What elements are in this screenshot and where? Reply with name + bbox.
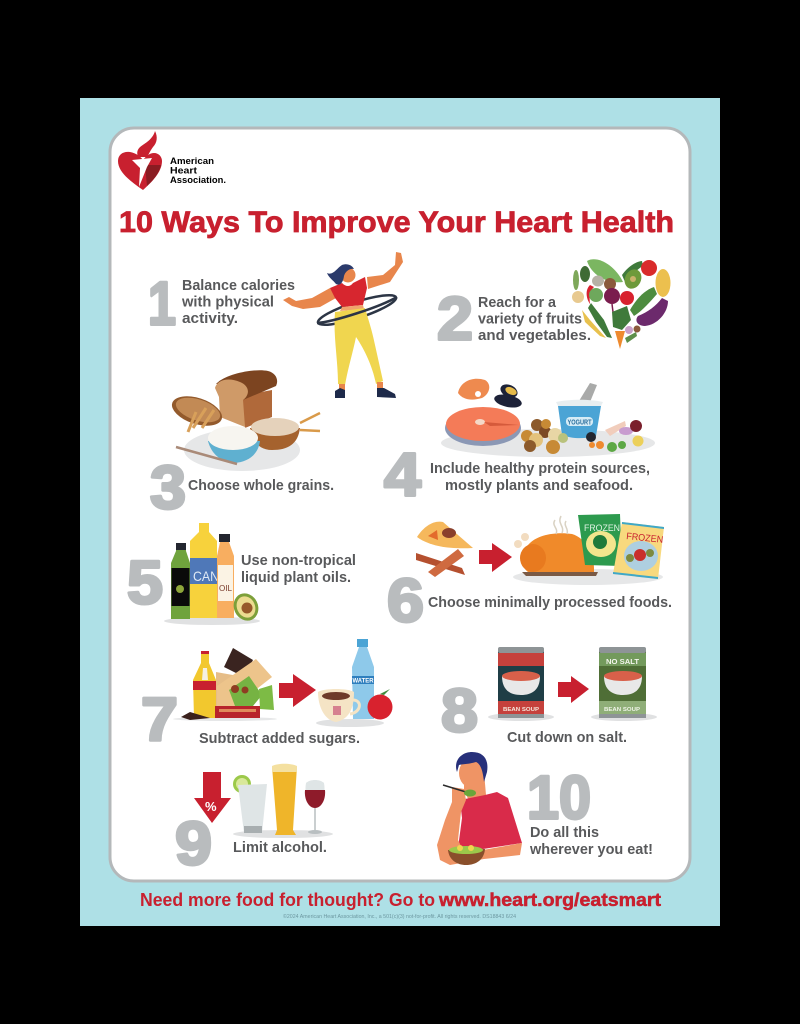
- text 1: [181, 277, 295, 327]
- text 8: Cut down on salt.: [507, 729, 627, 746]
- illustration: pizza and bacon: [416, 522, 473, 577]
- arrow: [279, 674, 316, 707]
- text 5: Use non-tropical: [241, 552, 356, 569]
- text 5: liquid plant oils.: [241, 569, 351, 586]
- text 10: Do all this: [530, 824, 599, 841]
- text 2: and vegetables.: [478, 327, 591, 344]
- illustration: oil bottles and avocado: [164, 523, 263, 625]
- item 8: cut down on salt: [441, 647, 657, 746]
- text 4: [430, 460, 650, 494]
- illustration: heart of vegetables: [572, 259, 670, 349]
- illustration: drinks: [233, 764, 333, 838]
- number 7: 7: [141, 686, 178, 754]
- icon: heart and torch: [118, 131, 162, 190]
- arrow: [479, 543, 512, 572]
- item 5: plant oils: [127, 523, 356, 625]
- text 3: Choose whole grains.: [188, 477, 334, 494]
- item 10: wherever you eat: [437, 752, 653, 865]
- illustration: soda and snack bars: [173, 648, 277, 721]
- item 1: balance calories: [148, 252, 403, 398]
- text 1: activity.: [182, 310, 238, 327]
- arrow: [558, 676, 589, 703]
- text 10: [529, 824, 653, 858]
- text 5: [241, 552, 356, 586]
- number 6: 6: [387, 566, 424, 634]
- illustration: no salt soup can: NO SALT: [606, 659, 640, 666]
- text 1: with physical: [181, 294, 274, 310]
- footer call to action: www.heart.org/eatsmart: [438, 889, 661, 910]
- illustration: frozen vegetable packs: [578, 514, 664, 579]
- logo text: Association.: [170, 175, 226, 186]
- number 3: 3: [150, 454, 186, 522]
- illustration: woman with hula hoop: [283, 252, 403, 398]
- number 5: 5: [127, 548, 163, 616]
- item 3: whole grains: [150, 370, 334, 522]
- illustration: salmon, nuts, yogurt: [441, 379, 655, 457]
- logo text: [170, 156, 226, 186]
- text 1: Balance calories: [182, 277, 295, 294]
- white content panel: [110, 128, 690, 881]
- title: 10 Ways To Improve Your Heart Health: [119, 206, 674, 239]
- item 9: limit alcohol: [175, 764, 333, 878]
- illustration: regular soup can: [488, 647, 554, 721]
- illustration: salmon, nuts, yogurt: YOGURT: [568, 420, 592, 426]
- logo text: Heart: [170, 166, 198, 176]
- logo: American Heart Association: [118, 131, 226, 190]
- copyright line: ©2024 American Heart Association, Inc., a 501(c)(3) not-for-profit. All rights reserved. DS18843 6/24: [283, 913, 516, 920]
- teal page background: [80, 98, 720, 926]
- footer call to action: Need more food for thought? Go to: [140, 889, 435, 910]
- illustration: water, tea and apple: WATER: [352, 678, 374, 684]
- item 6: minimally processed foods: [387, 514, 672, 634]
- number 8: 8: [441, 676, 478, 744]
- number 2: 2: [437, 284, 473, 352]
- illustration: oil bottles and avocado: OIL: [219, 584, 233, 593]
- text 2: Reach for a: [478, 294, 557, 311]
- text 9: Limit alcohol.: [233, 839, 327, 856]
- number 10: 10: [527, 764, 591, 832]
- arrow: down with percent: %: [205, 799, 217, 814]
- illustration: bread and grains: [168, 370, 320, 471]
- illustration: oil bottles and avocado: CAN: [193, 568, 219, 584]
- number 1: 1: [148, 270, 176, 338]
- illustration: roast turkey: [513, 516, 663, 585]
- item 4: healthy protein: [384, 379, 655, 508]
- number 9: 9: [175, 810, 212, 878]
- text 2: variety of fruits: [478, 310, 582, 328]
- illustration: no salt soup can: BEAN SOUP: [604, 707, 640, 713]
- illustration: frozen vegetable packs: FROZEN: [626, 531, 664, 546]
- illustration: man eating salad: [437, 752, 522, 865]
- footer call to action: [140, 889, 661, 910]
- illustration: regular soup can: BEAN SOUP: [503, 707, 539, 713]
- logo text: American: [170, 156, 214, 167]
- text 10: wherever you eat!: [529, 841, 653, 858]
- text 6: Choose minimally processed foods.: [428, 594, 672, 611]
- arrow: down with percent: [194, 772, 231, 823]
- item 7: added sugars: [141, 639, 392, 754]
- item 2: fruits and vegetables: [437, 259, 670, 352]
- text 7: Subtract added sugars.: [199, 730, 360, 747]
- illustration: frozen vegetable packs: FROZEN: [584, 523, 620, 534]
- text 4: mostly plants and seafood.: [445, 477, 633, 494]
- number 4: 4: [384, 440, 421, 508]
- text 4: Include healthy protein sources,: [430, 460, 650, 477]
- illustration: no salt soup can: [591, 647, 657, 721]
- text 2: [478, 294, 591, 344]
- illustration: water, tea and apple: [316, 639, 392, 727]
